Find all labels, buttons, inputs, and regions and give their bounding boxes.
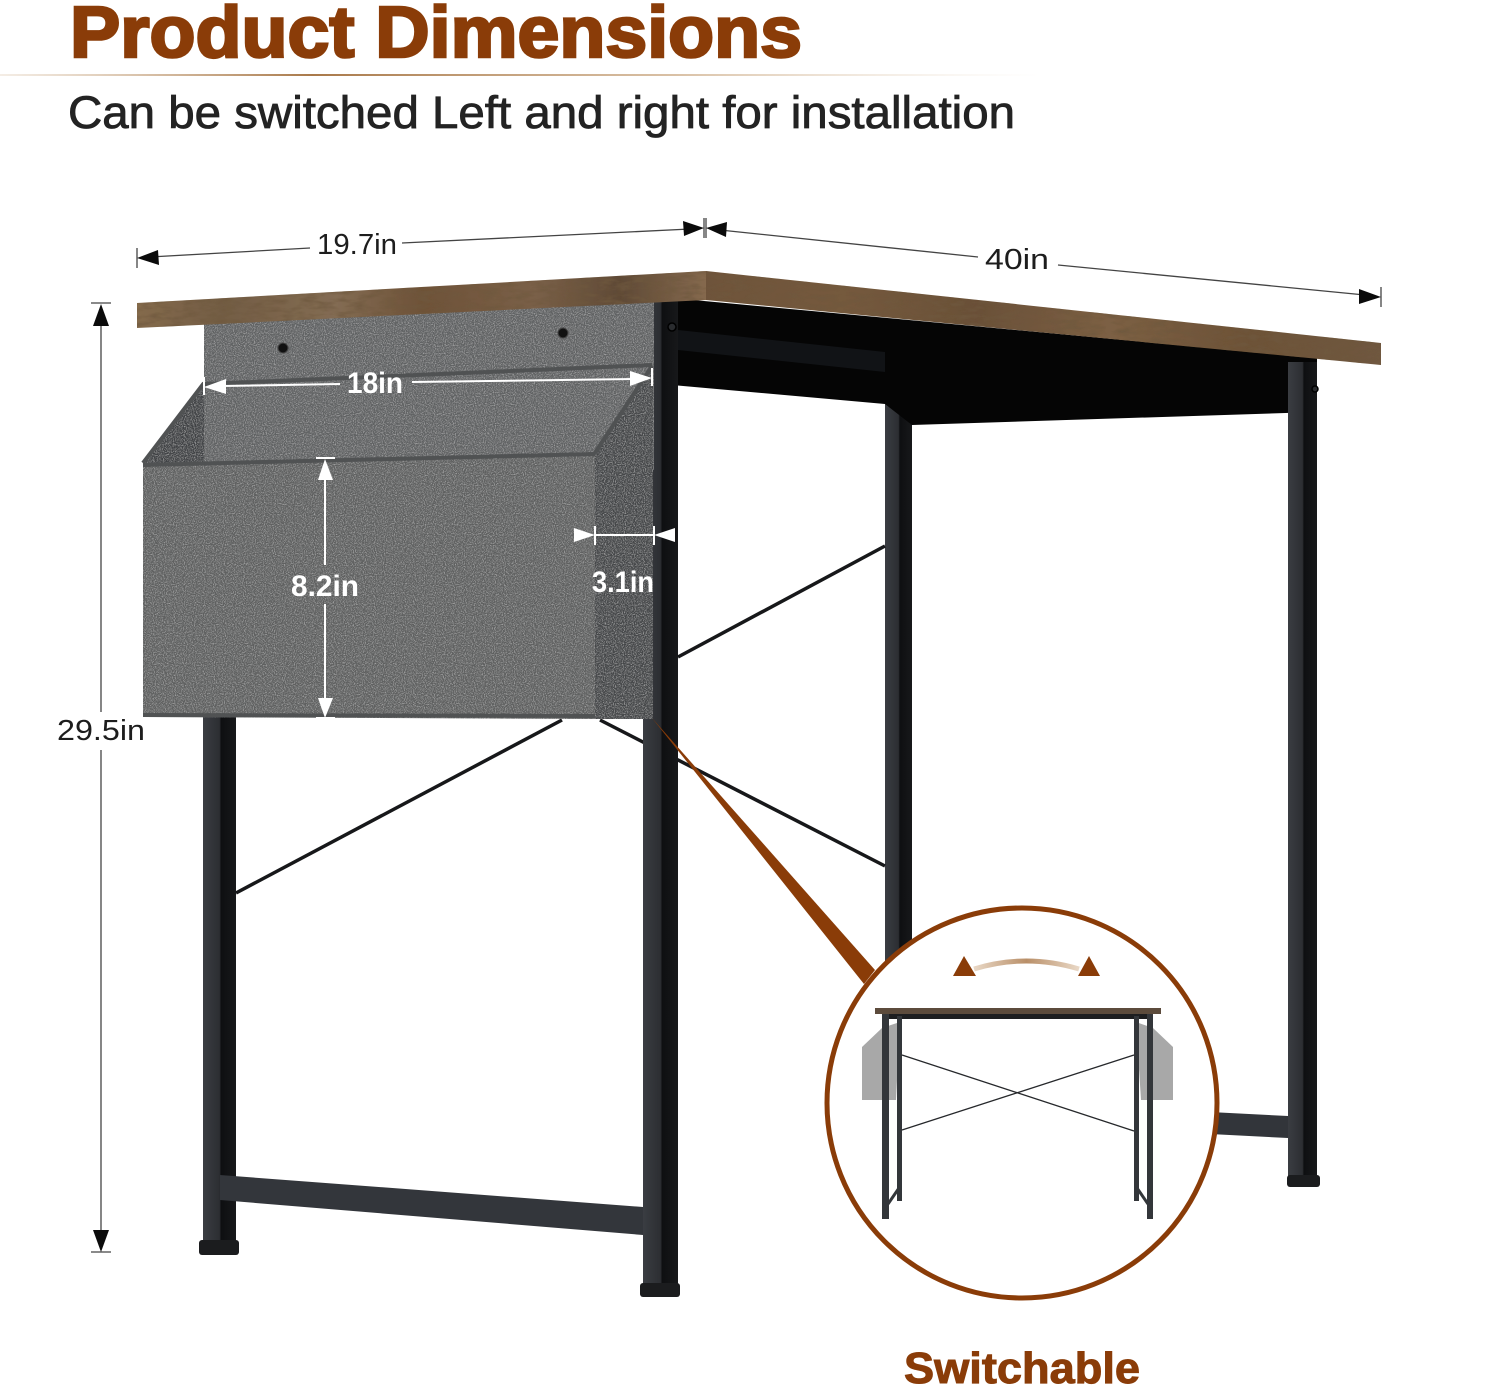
desktop <box>137 271 1381 365</box>
callout pointer <box>652 718 875 984</box>
front right leg <box>640 300 680 1297</box>
dimension: 29.5in: 29.5in <box>57 715 145 747</box>
leg bolts <box>668 323 1318 392</box>
dimension: 40in <box>706 218 1381 307</box>
desk illustration <box>137 271 1381 1297</box>
mini bags <box>862 1022 1173 1100</box>
dimension: 40in: 40in <box>985 244 1049 276</box>
subtitle: Can be switched Left and right for installation <box>68 87 1015 138</box>
dimension: 29.5in <box>57 303 145 1252</box>
cross wires <box>236 546 885 893</box>
dimension: 19.7in <box>137 218 704 268</box>
front left leg <box>199 716 239 1255</box>
callout circle <box>827 908 1217 1298</box>
dimension: 18in: 18in <box>347 367 403 400</box>
mini desk <box>875 1008 1161 1219</box>
switch arrow <box>953 956 1100 976</box>
dimension: 3.1in: 3.1in <box>592 566 654 599</box>
dimension: 18in <box>204 367 652 400</box>
bag seams <box>143 365 652 716</box>
bag front panel <box>143 452 595 719</box>
bag rivets <box>278 328 568 353</box>
back left leg <box>885 400 912 970</box>
storage bag <box>143 328 653 719</box>
underside apron <box>672 298 1317 425</box>
bag back panel <box>204 298 654 480</box>
dimension: 8.2in <box>291 458 359 718</box>
bag inner left side <box>143 383 204 463</box>
front lower bar <box>220 1175 643 1235</box>
back right leg <box>1287 362 1320 1187</box>
dimension: 3.1in <box>574 526 675 599</box>
dimension: 19.7in: 19.7in <box>317 229 397 261</box>
back lower bar <box>1210 1112 1288 1138</box>
dimension: 8.2in: 8.2in <box>291 570 359 603</box>
bag right side <box>595 367 653 719</box>
